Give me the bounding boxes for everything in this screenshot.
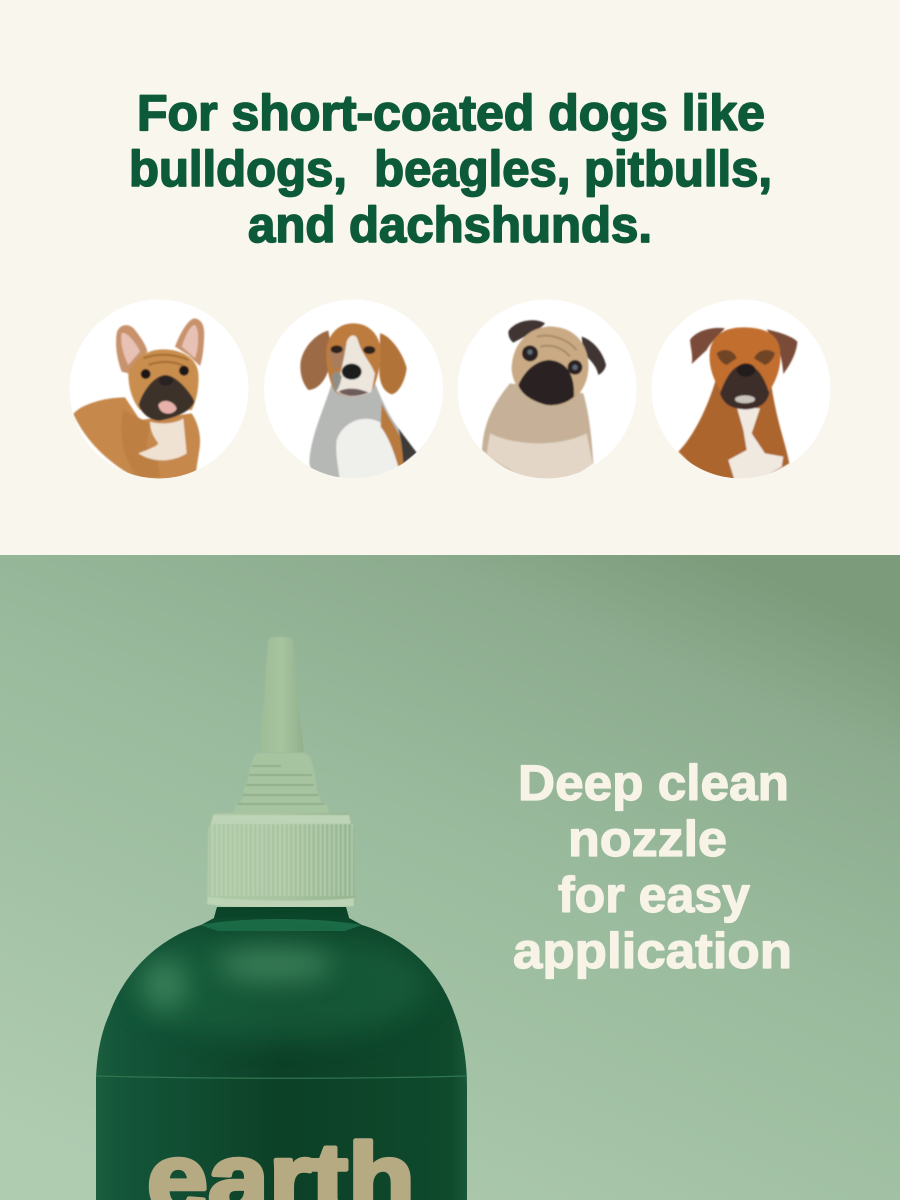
panel: cream top section — [0, 0, 900, 555]
dog portrait: boxer — [652, 300, 830, 482]
bottle body — [90, 905, 475, 1200]
dog portrait: beagle — [264, 300, 443, 482]
callout: deep clean nozzle: application — [513, 923, 792, 979]
dog portrait: french bulldog — [70, 300, 248, 482]
callout: deep clean nozzle: Deep clean — [518, 755, 789, 811]
dog portrait: pug — [458, 300, 636, 482]
panel: green bottom section — [0, 555, 900, 1200]
callout: deep clean nozzle: nozzle — [568, 811, 727, 867]
threaded collar — [234, 753, 329, 814]
heading — [129, 85, 772, 253]
callout: deep clean nozzle — [513, 755, 792, 979]
heading: For short-coated dogs like — [137, 85, 765, 141]
heading: bulldogs, beagles, pitbulls, — [129, 141, 772, 197]
bottle nozzle and cap — [90, 637, 475, 1200]
callout: deep clean nozzle: for easy — [558, 867, 750, 923]
nozzle tip — [259, 637, 304, 752]
heading: and dachshunds. — [248, 197, 652, 253]
ribbed cap — [207, 813, 355, 908]
